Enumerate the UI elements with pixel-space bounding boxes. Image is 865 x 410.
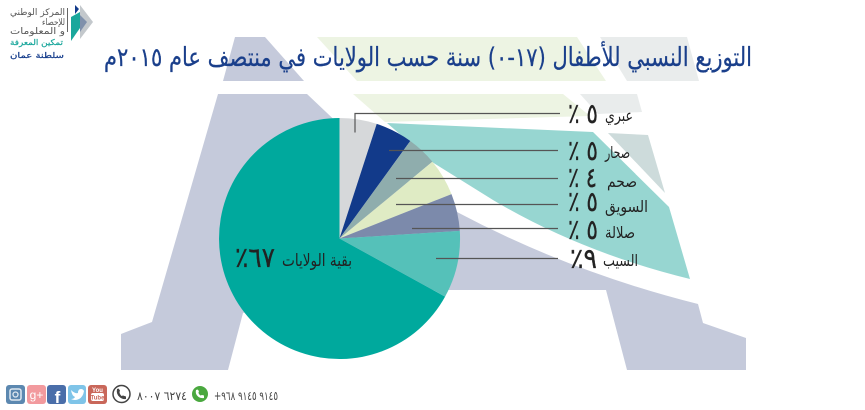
label: Salalah [568,213,635,246]
logo name: المركز الوطني [10,8,65,18]
logo slogan: تمكين المعرفة [10,38,63,47]
label: Suwaiq: السويق [605,197,648,217]
whatsapp number: +٩٦٨ ٩١٤٥ ٩١٤٥ [214,389,278,403]
logo [10,5,93,60]
background decorative letter shapes [121,37,746,370]
slice: rest of governorates 67% [219,118,445,359]
label: Suwaiq: ٥ ٪ [568,185,598,218]
label: Seeb: السيب [603,251,638,270]
label: Salalah: ٥ ٪ [568,213,598,246]
phone number: ٨٠٠٧ ٦٢٧٤ [137,389,187,403]
label: Saham [568,161,637,194]
title: التوزيع النسبي للأطفال (١٧-٠) سنة حسب الولايات في منتصف عام ٢٠١٥م [104,40,752,73]
icon: youtube: Tube [91,396,105,402]
label: Sohar [568,134,630,167]
label: Seeb: ٩٪ [570,242,597,275]
icon: google plus: g+ [30,388,43,402]
slice: Suwaiq 5% [340,162,452,238]
slice: Ibri 5% [340,118,377,238]
icon: facebook [47,385,66,407]
label: Saham: ٤ ٪ [568,161,597,194]
slice: Seeb 9% [340,231,460,297]
slice: Saham 4% [340,141,432,238]
slice: Sohar 5% [340,124,410,238]
label: Sohar: ٥ ٪ [568,134,598,167]
label: Ibri: ٥ ٪ [568,97,598,130]
icon: google plus [27,385,46,404]
logo country: سلطنة عمان [10,51,64,60]
footer contact bar [6,385,278,407]
label: Suwaiq [568,185,648,218]
label: Ibri: عبري [605,106,633,126]
label: rest of governorates [235,241,352,274]
label: Seeb [570,242,638,275]
label: Saham: صحم [607,172,637,191]
label: Salalah: صلالة [605,223,635,242]
label: rest of governorates: ٦٧٪ [235,241,275,274]
logo name: للإحصاء [42,18,65,28]
icon: facebook: f [55,388,61,407]
label: Ibri [568,97,633,130]
icon: youtube [88,385,107,404]
label: rest of governorates: بقية الولايات [282,251,352,271]
label: Sohar: صحار [604,143,630,163]
logo icon [67,5,93,41]
icon: twitter [68,385,86,404]
leader lines [355,114,560,258]
icon: youtube: You [92,388,103,394]
icon: whatsapp [192,386,208,402]
pie chart [219,118,460,359]
icon: phone [113,386,130,402]
logo name: و المعلومات [10,27,65,37]
icon: instagram [6,385,25,404]
logo name [10,8,65,37]
slice: Salalah 5% [340,194,460,238]
